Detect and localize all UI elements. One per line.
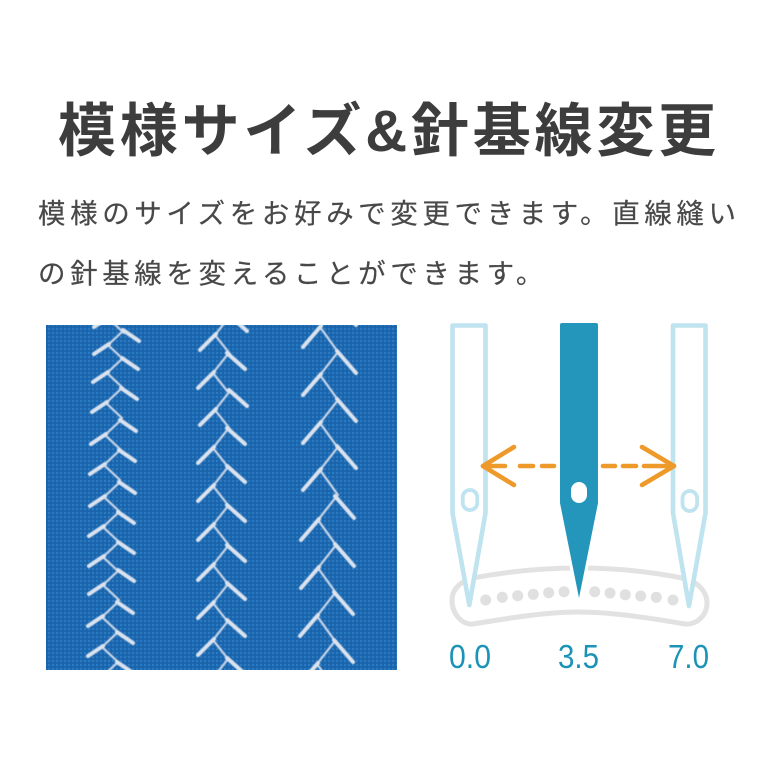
stitch column: narrow pattern	[88, 303, 139, 692]
description text	[38, 198, 741, 289]
title: 模様サイズ&針基線変更	[58, 99, 720, 164]
needle position labels: 7.0	[668, 638, 709, 675]
panel: fabric stitch sample	[46, 325, 397, 670]
right orange dashed arrow	[603, 447, 674, 485]
needle plate	[452, 568, 707, 624]
stitch column: wide pattern	[297, 325, 359, 670]
needle position labels: 0.0	[449, 638, 491, 675]
description text: 模様のサイズをお好みで変更できます。直線縫い	[38, 198, 741, 229]
left orange dashed arrow	[483, 447, 554, 485]
needle position labels	[449, 638, 709, 675]
center needle at 3.5	[560, 323, 598, 598]
needle position diagram	[449, 323, 709, 675]
needle position labels: 3.5	[558, 638, 599, 675]
right needle at 7.0	[673, 326, 706, 606]
left needle at 0.0	[452, 326, 486, 605]
description text: の針基線を変えることができます。	[38, 258, 548, 289]
stitch column: medium pattern	[198, 277, 247, 697]
